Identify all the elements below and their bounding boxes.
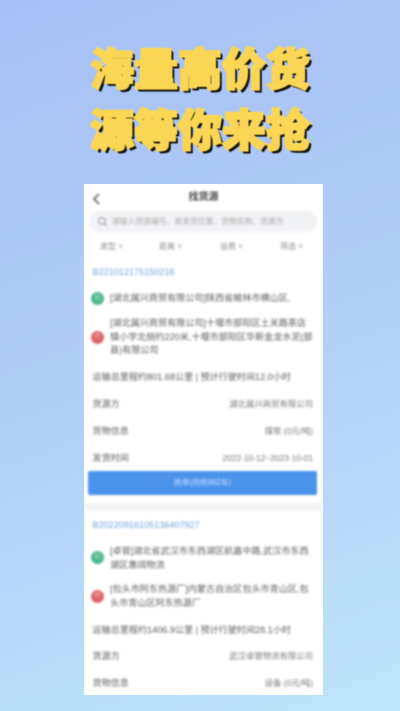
title: 源等你来抢: [90, 107, 310, 156]
row: goods 2: 货物信息: [92, 678, 129, 688]
section gap: [84, 503, 323, 511]
row: goods 2: 设备 (0元/吨): [265, 678, 313, 688]
icon: search: [97, 216, 108, 227]
filter tabs: [100, 241, 304, 252]
panel: phone screen: [84, 184, 323, 695]
row: shipper 1: [92, 398, 314, 409]
filter tabs: 筛选 ˅: [280, 242, 303, 251]
icon: origin green 2: [91, 550, 104, 564]
icon: origin green: 起: [94, 295, 100, 301]
row: goods 2: [92, 677, 314, 688]
filter tabs: 运费 ˅: [220, 242, 243, 251]
heading: screen title: 找货源: [188, 192, 218, 203]
title: [89, 45, 314, 156]
row: shipper 2: 武汉卓管物流有限公司: [229, 651, 313, 661]
row: shipper 1: 货源方: [92, 399, 120, 409]
origin address 2: 湖区惠阔物流: [110, 560, 165, 570]
filter tabs: 类型 ˅: [100, 242, 123, 251]
search placeholder: 请输入货源编号、收发货位置、货物名称、货源方: [112, 216, 284, 226]
row: goods 1: 货物信息: [92, 426, 129, 436]
origin address 1: [湖北属兴商贸有限公司]陕西省榆林市横山区,: [110, 293, 290, 303]
route summary 1: 运输总里程约801.68公里 | 预计行驶时间12.0小时: [92, 372, 291, 382]
row: shipper 2: 货源方: [92, 651, 120, 661]
destination address 1: 镇小学北侧约220米,十堰市部阳区华新金龙水泥(部: [110, 332, 313, 342]
icon: destination red: [91, 330, 104, 344]
row: shipper 1: 湖北属兴商贸有限公司: [229, 399, 313, 409]
row: time 1: 发货时间: [92, 453, 129, 463]
row: shipper 2: [92, 650, 314, 661]
button: grab order: [88, 471, 317, 495]
destination address 2: [109, 583, 310, 608]
destination address 2: 头市青山区阿东热源厂: [110, 598, 201, 608]
title: 海量高价货: [90, 46, 310, 95]
icon: destination red 2: [91, 590, 104, 602]
order number 2: B20220916105136407927: [92, 520, 200, 530]
route summary 2: 运输总里程约1406.9公里 | 预计行驶时间28.1小时: [92, 625, 291, 635]
row: time 1: [92, 452, 314, 463]
icon: origin green: [91, 292, 104, 305]
search bar: [89, 211, 317, 232]
order number 1: B221012175150216: [92, 267, 174, 277]
destination address 1: [109, 317, 314, 356]
icon: origin green 2: 起: [94, 554, 100, 560]
row: goods 1: 煤炭 (0元/吨): [265, 426, 313, 436]
icon: back arrow: [92, 192, 100, 206]
row: goods 1: [92, 425, 314, 436]
origin address 2: [109, 545, 310, 570]
origin address 2: [卓管]湖北省武汉市东西湖区航嘉中路,武汉市东西: [110, 546, 309, 556]
destination address 2: [包头市阿东热源厂]内蒙古自治区包头市青山区,包: [110, 584, 309, 594]
row: time 1: 2022-10-12~2023-10-01: [222, 453, 313, 463]
filter tabs: 距离 ˅: [159, 242, 182, 251]
icon: destination red: 终: [94, 334, 100, 340]
destination address 1: 县)有限公司: [110, 345, 158, 355]
destination address 1: [湖北属兴商贸有限公司]十堰市部阳区土关路茶店: [110, 318, 306, 328]
button label: 抢单(待抢992车): [174, 478, 231, 487]
icon: destination red 2: 终: [94, 592, 100, 598]
